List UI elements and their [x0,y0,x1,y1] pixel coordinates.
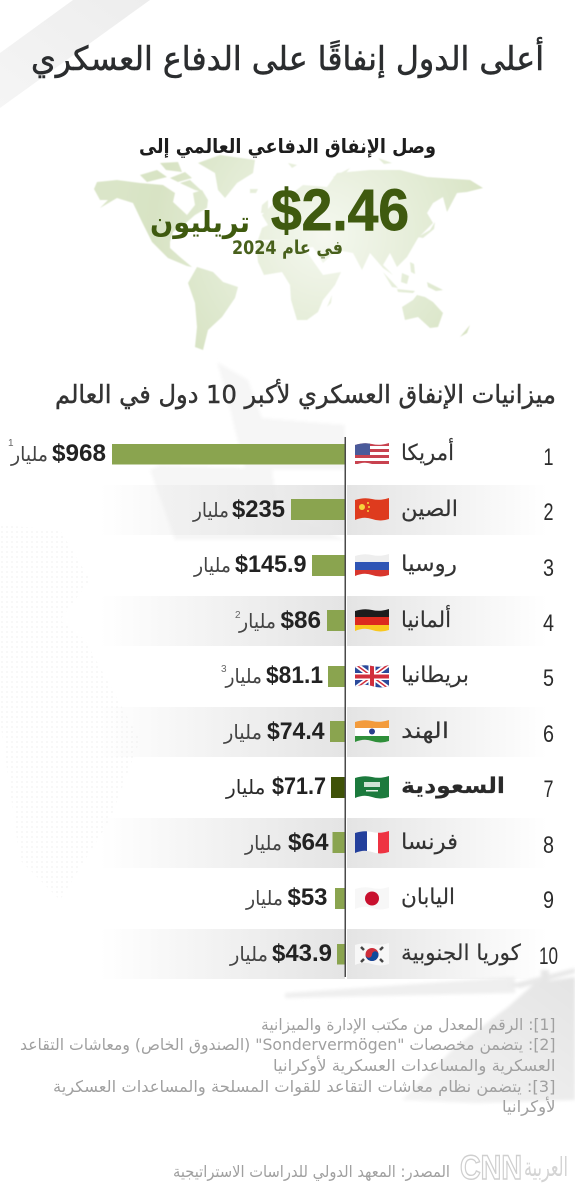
country: ألمانيا [401,605,451,633]
row 7: Saudi Arabia [225,776,553,799]
country: بريطانيا [401,663,469,688]
bar [331,777,345,798]
row 8: France [244,831,554,855]
source: المصدر: المعهد الدولي للدراسات الاستراتيجية [173,1162,450,1182]
background: helicopter silhouette [285,968,575,1103]
bar [332,832,345,853]
rank: 8 [543,832,554,859]
country: أمريكا [401,438,454,466]
country: السعودية [401,774,505,799]
bar [337,944,345,964]
year: في عام 2024 [232,237,343,259]
unit: مليار [244,831,282,855]
country: فرنسا [401,830,458,855]
footnotes: [1]: الرقم المعدل من مكتب الإدارة والميزانية [261,1015,556,1035]
bar [330,721,345,742]
unit: مليار [193,553,231,577]
country: كوريا الجنوبية [401,941,522,966]
unit: مليار [223,720,262,744]
greenland [198,155,255,198]
title: أعلى الدول إنفاقًا على الدفاع العسكري [31,37,544,79]
flag: Germany [355,608,389,633]
value: $64 [288,829,329,856]
unit: مليار [225,664,262,688]
country: روسيا [401,552,457,577]
australia [402,295,443,328]
footnote mark: 2 [235,610,241,621]
unit: مليار [192,498,229,522]
footnotes [20,1015,556,1117]
flag: Russia [355,553,389,578]
background: central aircraft silhouette [150,362,345,540]
country: اليابان [401,885,455,910]
row 4: Germany [236,604,554,633]
flag: South Korea [355,942,389,967]
africa [256,240,341,320]
unit: مليار [229,942,268,966]
flag: USA [355,443,389,464]
background: missile streak [0,0,150,108]
rank: 7 [544,776,554,803]
flag: India [355,719,389,744]
south america [188,267,238,350]
unit: مليار [10,442,48,466]
rank: 5 [543,665,554,692]
rank: 6 [543,721,554,748]
north america [94,180,208,267]
country: الهند [401,719,449,744]
value: $145.9 [235,551,306,578]
flag: France [355,830,389,855]
rank: 9 [543,887,554,914]
eurasia [258,170,483,275]
logo: CNN Arabic [460,1149,568,1187]
value: $968 [52,440,106,467]
row 10: South Korea [229,943,558,966]
row bands [100,485,547,979]
bar [112,444,345,464]
footnotes: العسكرية والمساعدات العسكرية لأوكرانيا [273,1055,556,1076]
footnotes: [2]: يتضمن مخصصات "Sondervermögen" (الصندوق الخاص) ومعاشات التقاعد [20,1035,556,1055]
footnote mark: 1 [8,438,14,449]
row 3: Russia [193,554,554,577]
value: $53 [288,884,328,911]
flag: Saudi Arabia [355,775,389,800]
value: $71.7 [272,773,326,800]
chart heading: ميزانيات الإنفاق العسكري لأكبر 10 دول في العالم [55,378,556,410]
row 1: USA [8,438,553,466]
value: $43.9 [272,940,332,967]
rank: 10 [539,943,558,970]
value: $86 [280,607,321,634]
unit: trillion: تريليون [150,205,250,239]
rank: 2 [544,499,554,526]
flag: Japan [365,892,379,906]
value: $74.4 [267,718,325,745]
logo: CNN Arabic: CNN [460,1149,522,1187]
flag: China [355,497,389,522]
bar [312,555,345,576]
chart axis line [344,437,346,977]
row 6: India [223,720,554,744]
footnote mark: 3 [221,664,227,675]
bar [327,610,345,631]
rank: 1 [544,444,554,471]
amount: $2.46 [271,178,409,243]
unit: مليار [238,609,276,633]
value: $235 [232,496,285,523]
subtitle: وصل الإنفاق الدفاعي العالمي إلى [139,134,436,159]
rank: 3 [543,555,554,582]
world map [94,155,483,350]
southeast asia islands [383,272,398,288]
row 5: UK [221,665,554,688]
footnotes: لأوكرانيا [502,1096,556,1117]
unit: مليار [245,886,283,910]
bar [335,888,345,909]
bar [328,666,345,687]
footnotes: [3]: يتضمن نظام معاشات التقاعد للقوات المسلحة والمساعدات العسكرية [53,1077,556,1097]
row 2: China [192,498,553,522]
bar [291,499,345,520]
rank: 4 [543,610,554,637]
background: dotted world map [0,525,140,900]
unit: مليار [225,775,266,799]
country: الصين [401,497,458,522]
flag: UK [355,664,389,689]
row 9: Japan [245,887,554,910]
headline figure [150,178,409,243]
value: $81.1 [266,662,323,689]
